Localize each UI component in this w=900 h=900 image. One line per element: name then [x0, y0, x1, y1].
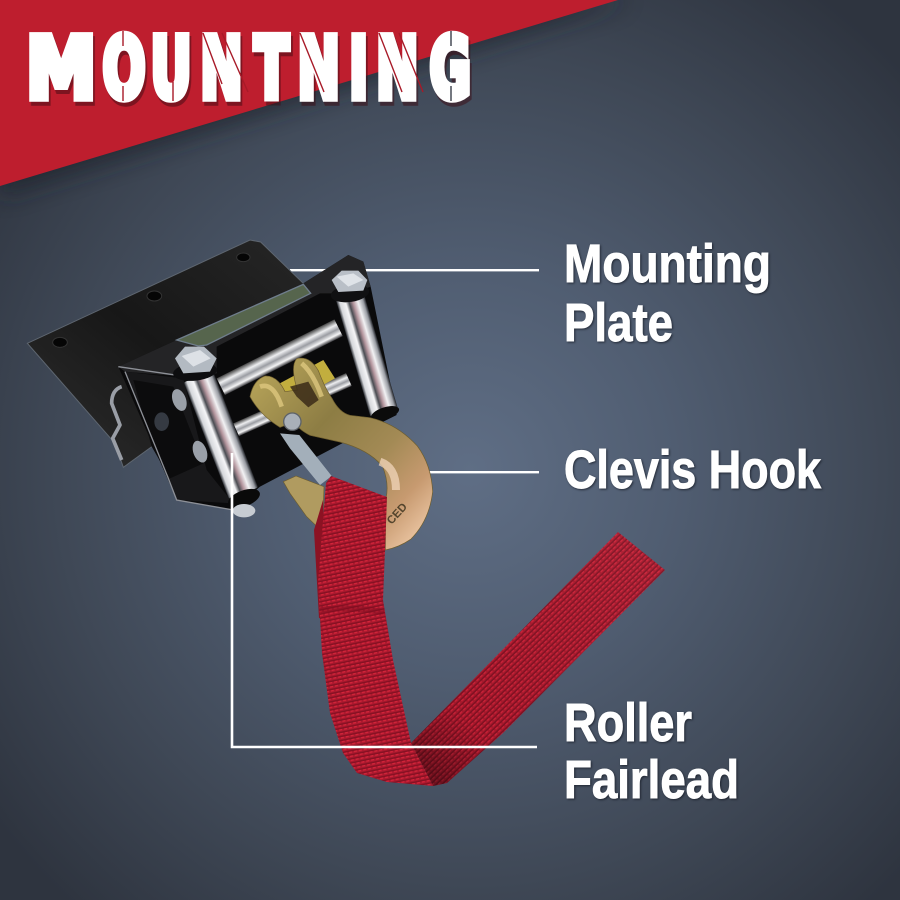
rear vertical roller	[330, 271, 401, 424]
latch tip	[283, 476, 324, 532]
label: mounting plate: Mounting	[564, 234, 771, 294]
bolt ends	[169, 387, 210, 465]
hook highlight	[380, 462, 396, 490]
strap: front band	[318, 476, 433, 786]
strap shading	[411, 532, 665, 786]
photo: winch fairlead	[27, 240, 401, 517]
lower horizontal roller	[233, 373, 352, 436]
leader line: roller fairlead	[232, 453, 537, 747]
label: mounting plate	[564, 234, 771, 353]
title: M	[26, 21, 96, 118]
label: clevis hook: Clevis Hook	[564, 440, 822, 500]
title: OUNTNING	[103, 21, 471, 118]
yellow pin	[277, 360, 335, 403]
strap: rear band	[411, 532, 665, 786]
red corner banner	[0, 0, 618, 186]
latch arm	[280, 433, 332, 485]
strap: flap behind	[314, 500, 328, 620]
label: roller fairlead: Roller	[564, 693, 692, 753]
hook body	[250, 358, 433, 550]
lobe highlight	[260, 363, 322, 407]
latch pin	[284, 413, 301, 430]
upper horizontal roller	[217, 319, 343, 395]
leader line: clevis hook	[425, 471, 539, 473]
front vertical roller	[172, 347, 262, 517]
clevis hook	[250, 358, 433, 550]
eye opening	[290, 382, 319, 407]
leader line: mounting plate	[290, 269, 539, 271]
fairlead frame	[118, 255, 397, 510]
mounting plate	[27, 240, 307, 467]
label: roller fairlead: Fairlead	[564, 750, 739, 810]
warning label	[177, 284, 311, 346]
label: mounting plate: Plate	[564, 293, 673, 353]
stamped marking: CED	[385, 501, 410, 527]
label: roller fairlead	[564, 693, 739, 810]
strap: stitching	[320, 608, 384, 612]
banner shadow	[0, 0, 630, 196]
side handle	[112, 387, 122, 460]
